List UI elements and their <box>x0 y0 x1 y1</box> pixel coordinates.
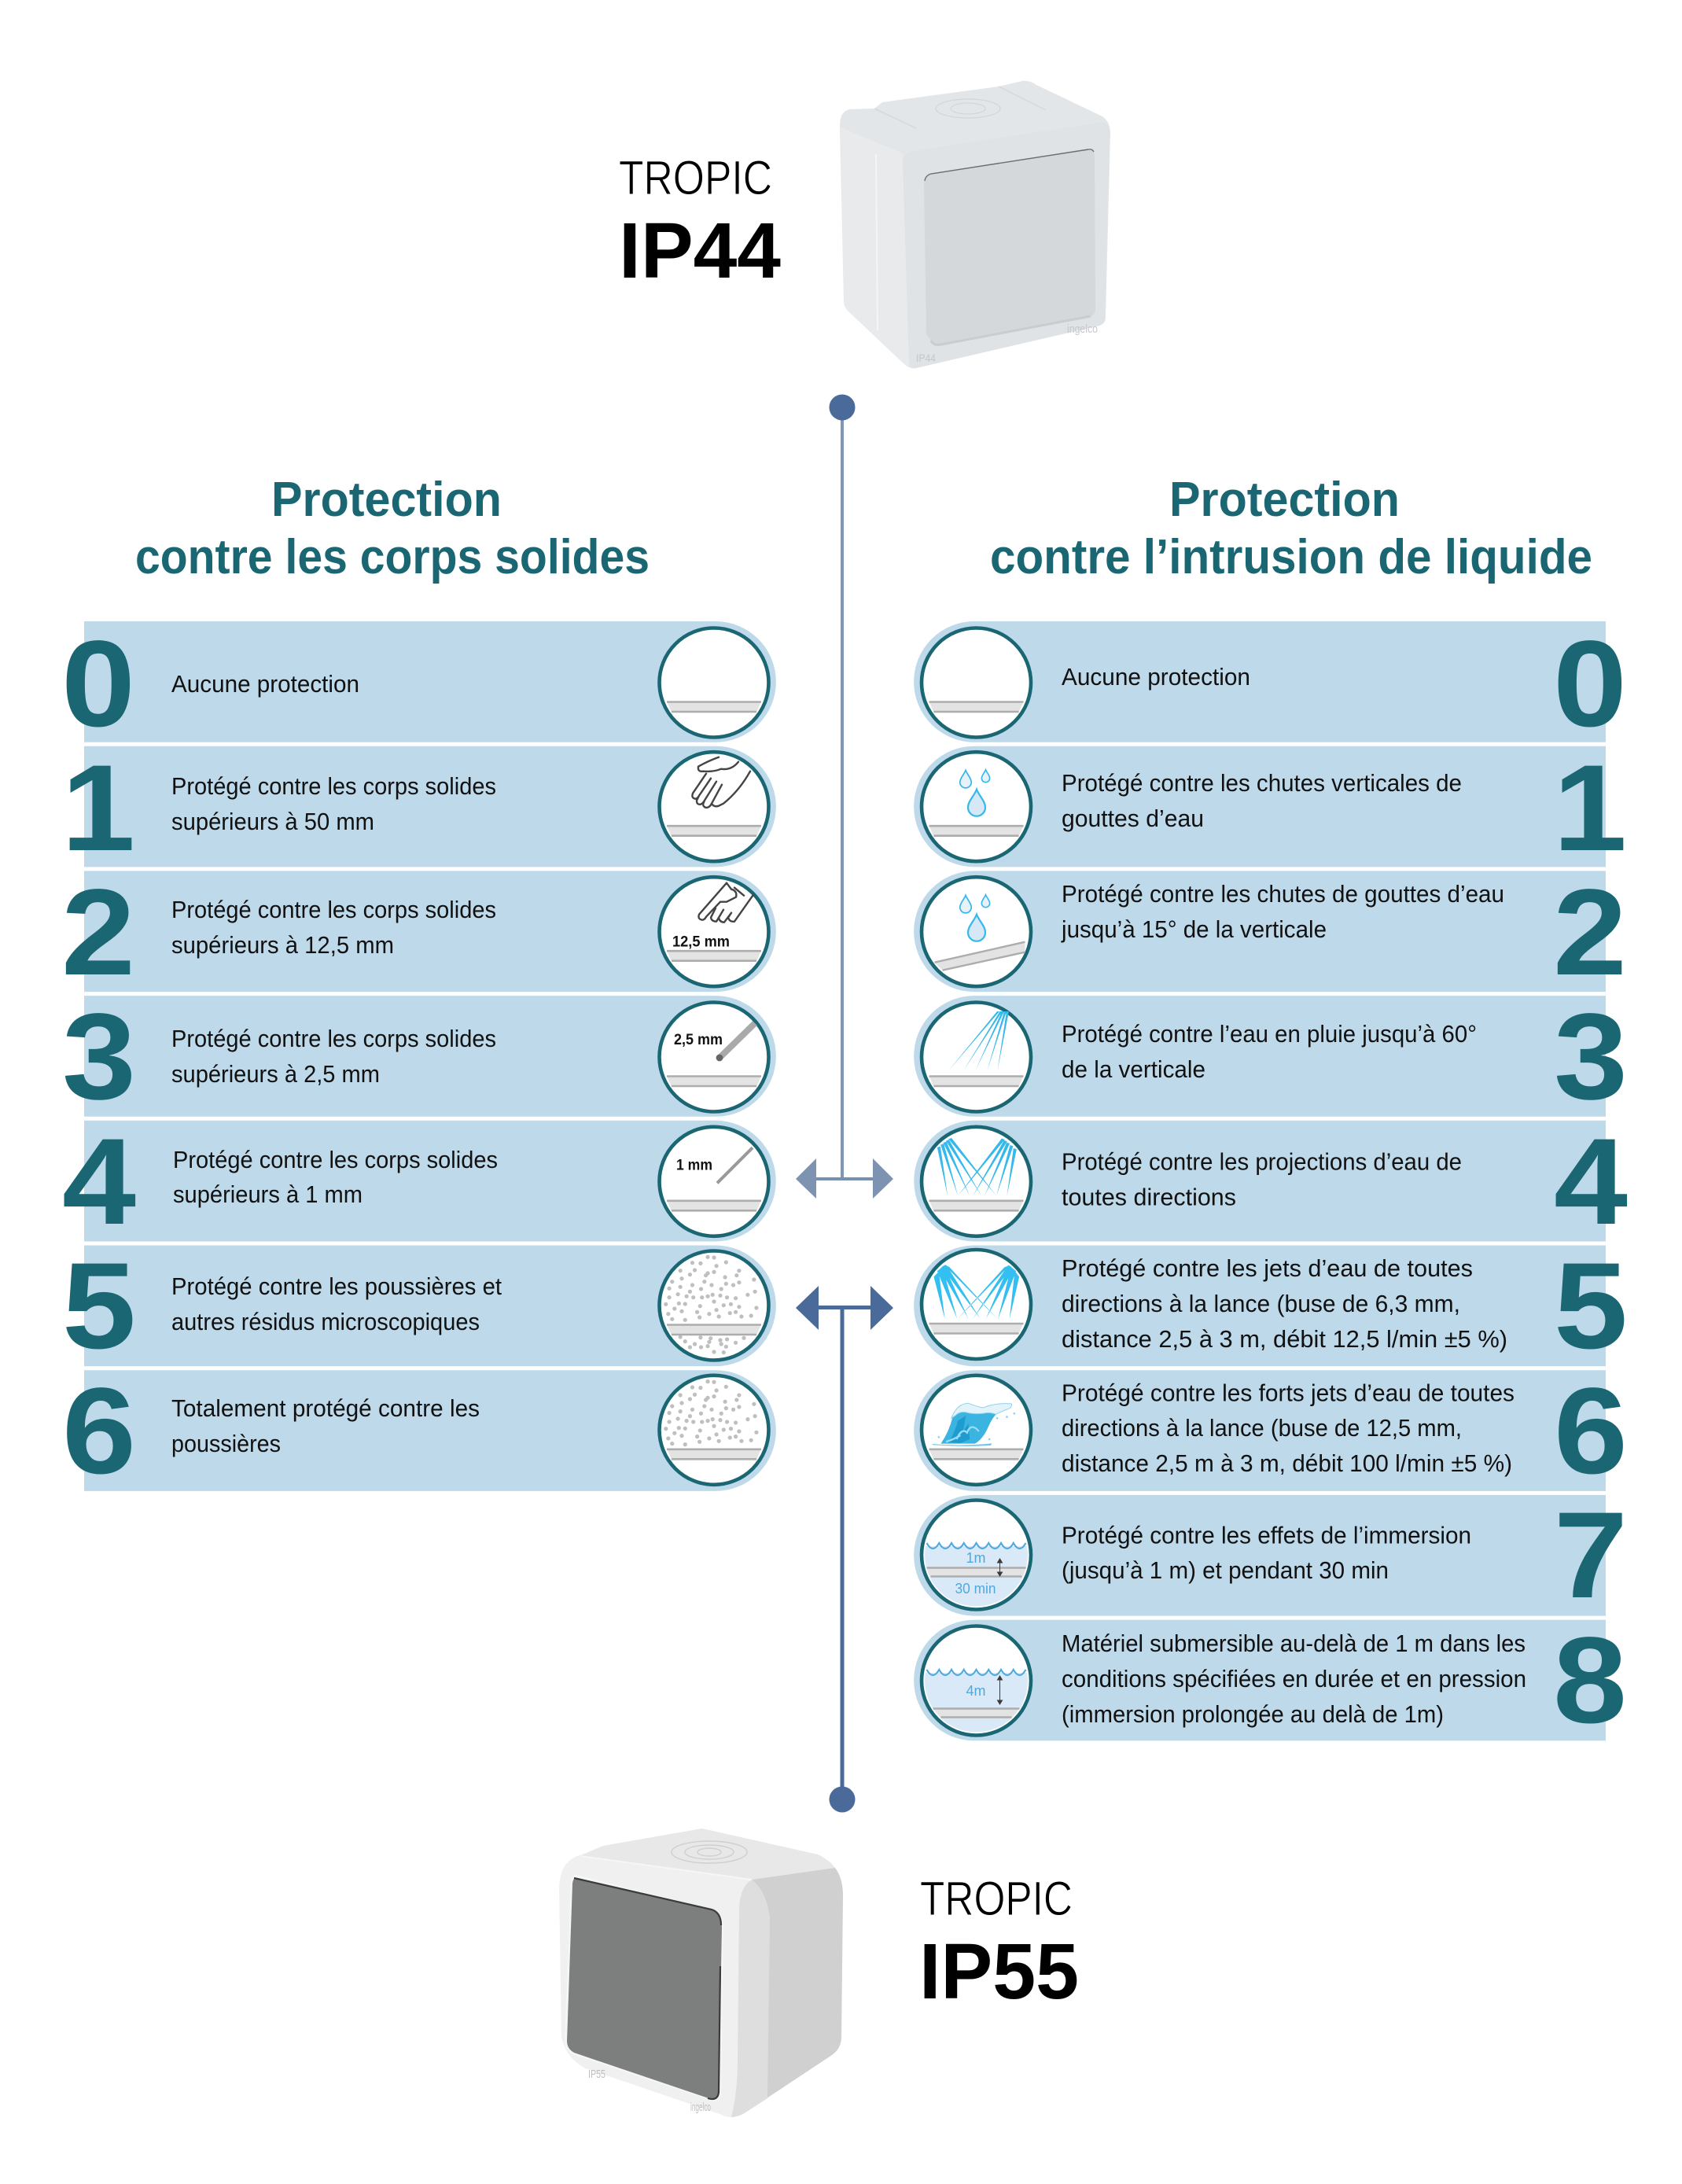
icon: immersion 4 m: 4m <box>966 1683 986 1699</box>
icon: drops on tilted surface <box>922 877 1031 986</box>
row: liquids 8: (immersion prolongée au delà de 1m) <box>1062 1700 1444 1728</box>
icon: jet rays <box>922 1250 1031 1359</box>
row: liquids 7: 7 <box>1554 1487 1628 1624</box>
icon: finger, 12.5 mm <box>659 877 769 986</box>
row: solids 2: Protégé contre les corps solides <box>171 896 496 923</box>
row: solids 3: supérieurs à 2,5 mm <box>171 1060 380 1088</box>
row: liquids 7: (jusqu’à 1 m) et pendant 30 min <box>1062 1556 1389 1584</box>
row: solids 3: 3 <box>62 989 136 1125</box>
row: liquids 3: Protégé contre l’eau en pluie jusqu’à 60° <box>1062 1020 1477 1048</box>
row: liquids 3 <box>914 989 1628 1125</box>
row: liquids 7: Protégé contre les effets de l’immersion <box>1062 1521 1471 1549</box>
icon: empty surface <box>922 628 1031 738</box>
row: solids 0 <box>61 616 776 753</box>
row: liquids 5: Protégé contre les jets d’eau de toutes <box>1062 1254 1473 1282</box>
row: liquids 7 <box>914 1494 1622 1616</box>
row: solids 5 <box>62 1238 776 1375</box>
product photo: IP55 switch: IP55 <box>588 2068 605 2081</box>
row: liquids 4 <box>914 1114 1628 1250</box>
row: liquids 8: conditions spécifiées en durée et en pression <box>1062 1665 1526 1692</box>
row: liquids 5: directions à la lance (buse de 6,3 mm, <box>1062 1290 1460 1317</box>
panel: solids table <box>61 616 776 1500</box>
icon: heavy dust <box>659 1376 769 1485</box>
arrow: IP44 level <box>796 1158 893 1199</box>
row: liquids 6: Protégé contre les forts jets d’eau de toutes <box>1062 1379 1515 1406</box>
row: solids 1 <box>61 740 776 877</box>
icon: spray rays <box>922 1127 1031 1236</box>
row: solids 3 <box>62 989 776 1125</box>
timeline: lower vertical connector <box>840 1308 845 1799</box>
icon: wire, 1 mm: 1 mm <box>676 1157 712 1173</box>
row: liquids 0: 0 <box>1553 616 1627 753</box>
product photo: IP55 switch <box>559 1829 843 2117</box>
row: liquids 6 <box>914 1363 1628 1500</box>
row: solids 1: 1 <box>61 740 135 877</box>
row: liquids 3: 3 <box>1554 989 1628 1125</box>
row: liquids 8: Matériel submersible au-delà de 1 m dans les <box>1062 1630 1526 1657</box>
icon: hand <box>659 752 769 861</box>
row: liquids 1 <box>914 740 1627 877</box>
product heading: Tropic IP44 <box>619 151 781 295</box>
row: liquids 8: 8 <box>1553 1612 1627 1749</box>
icon: immersion 1 m: 30 min <box>955 1581 996 1597</box>
row: liquids 8 <box>914 1620 1623 1741</box>
row: liquids 3: de la verticale <box>1062 1055 1205 1083</box>
product photo: IP55 switch: ingelco <box>690 2101 711 2114</box>
row: liquids 1: gouttes d’eau <box>1062 805 1204 832</box>
icon: rod, 2.5 mm: 2,5 mm <box>674 1032 723 1048</box>
product photo: IP44 switch <box>840 81 1110 368</box>
heading: solids protection <box>135 473 650 584</box>
row: liquids 4: toutes directions <box>1062 1183 1236 1211</box>
row: solids 4: 4 <box>62 1114 136 1250</box>
icon: rain rays <box>922 1002 1031 1112</box>
icon: wire, 1 mm <box>659 1127 769 1236</box>
row: liquids 6: distance 2,5 m à 3 m, débit 100 l/min ±5 %) <box>1062 1449 1512 1477</box>
product heading: Tropic IP44: IP44 <box>619 207 781 295</box>
row: solids 1: supérieurs à 50 mm <box>171 808 374 835</box>
row: solids 5: Protégé contre les poussières et <box>171 1272 502 1300</box>
heading: liquid protection <box>990 473 1592 584</box>
row: liquids 2: 2 <box>1553 864 1627 1001</box>
row: solids 5: 5 <box>62 1238 136 1375</box>
row: solids 5: autres résidus microscopiques <box>171 1308 480 1335</box>
icon: immersion 1 m: 1m <box>966 1550 986 1566</box>
row: solids 4 <box>62 1114 776 1250</box>
heading: solids protection: contre les corps solides <box>135 530 650 584</box>
row: solids 4: Protégé contre les corps solides <box>173 1146 498 1173</box>
product photo: IP44 switch: IP44 <box>916 352 936 364</box>
product heading: Tropic IP55 <box>919 1872 1079 2016</box>
row: liquids 5: distance 2,5 à 3 m, débit 12,5 l/min ±5 %) <box>1062 1325 1507 1353</box>
icon: drops <box>922 752 1031 861</box>
row: liquids 5 <box>914 1238 1628 1375</box>
product photo: IP44 switch: ingelco <box>1067 322 1098 336</box>
row: solids 6: 6 <box>62 1363 136 1500</box>
row: solids 1: Protégé contre les corps solides <box>171 772 496 800</box>
timeline: top dot <box>829 395 856 420</box>
panel: liquids table <box>914 616 1628 1749</box>
product heading: Tropic IP44: TROPIC <box>619 151 772 204</box>
product heading: Tropic IP55: IP55 <box>919 1928 1079 2016</box>
row: liquids 4: Protégé contre les projections d’eau de <box>1062 1148 1462 1175</box>
row: liquids 5: 5 <box>1554 1238 1628 1375</box>
timeline: upper vertical connector <box>841 417 844 1180</box>
row: liquids 4: 4 <box>1554 1114 1628 1250</box>
row: liquids 1: Protégé contre les chutes verticales de <box>1062 769 1462 797</box>
row: solids 6 <box>62 1363 776 1500</box>
row: solids 6: poussières <box>171 1430 281 1457</box>
arrow: IP55 level <box>796 1286 893 1330</box>
row: liquids 0: Aucune protection <box>1062 663 1250 691</box>
row: solids 2: supérieurs à 12,5 mm <box>171 931 394 959</box>
row: liquids 2 <box>914 864 1627 1001</box>
row: solids 2: 2 <box>61 864 135 1001</box>
icon: finger, 12.5 mm: 12,5 mm <box>672 934 730 951</box>
icon: rod, 2.5 mm <box>659 1002 769 1112</box>
row: liquids 0 <box>914 616 1627 753</box>
row: solids 3: Protégé contre les corps solides <box>171 1025 496 1052</box>
heading: liquid protection: contre l’intrusion de liquide <box>990 530 1592 584</box>
icon: dust <box>659 1250 769 1361</box>
heading: solids protection: Protection <box>271 473 502 527</box>
row: solids 0: Aucune protection <box>171 670 359 698</box>
icon: immersion 1 m <box>922 1501 1032 1613</box>
heading: liquid protection: Protection <box>1169 473 1400 527</box>
row: liquids 2: Protégé contre les chutes de gouttes d’eau <box>1062 880 1504 908</box>
row: liquids 6: 6 <box>1554 1363 1628 1500</box>
row: solids 4: supérieurs à 1 mm <box>173 1180 363 1208</box>
icon: wave <box>922 1376 1031 1485</box>
row: solids 2 <box>61 864 776 1001</box>
icon: empty surface <box>659 628 769 738</box>
row: solids 0: 0 <box>61 616 135 753</box>
row: liquids 1: 1 <box>1553 740 1627 877</box>
row: solids 6: Totalement protégé contre les <box>171 1394 480 1422</box>
timeline: bottom dot <box>829 1787 856 1812</box>
row: liquids 2: jusqu’à 15° de la verticale <box>1061 915 1327 943</box>
row: liquids 6: directions à la lance (buse de 12,5 mm, <box>1062 1414 1462 1442</box>
icon: immersion 4 m <box>922 1626 1032 1740</box>
product heading: Tropic IP55: TROPIC <box>920 1872 1073 1925</box>
